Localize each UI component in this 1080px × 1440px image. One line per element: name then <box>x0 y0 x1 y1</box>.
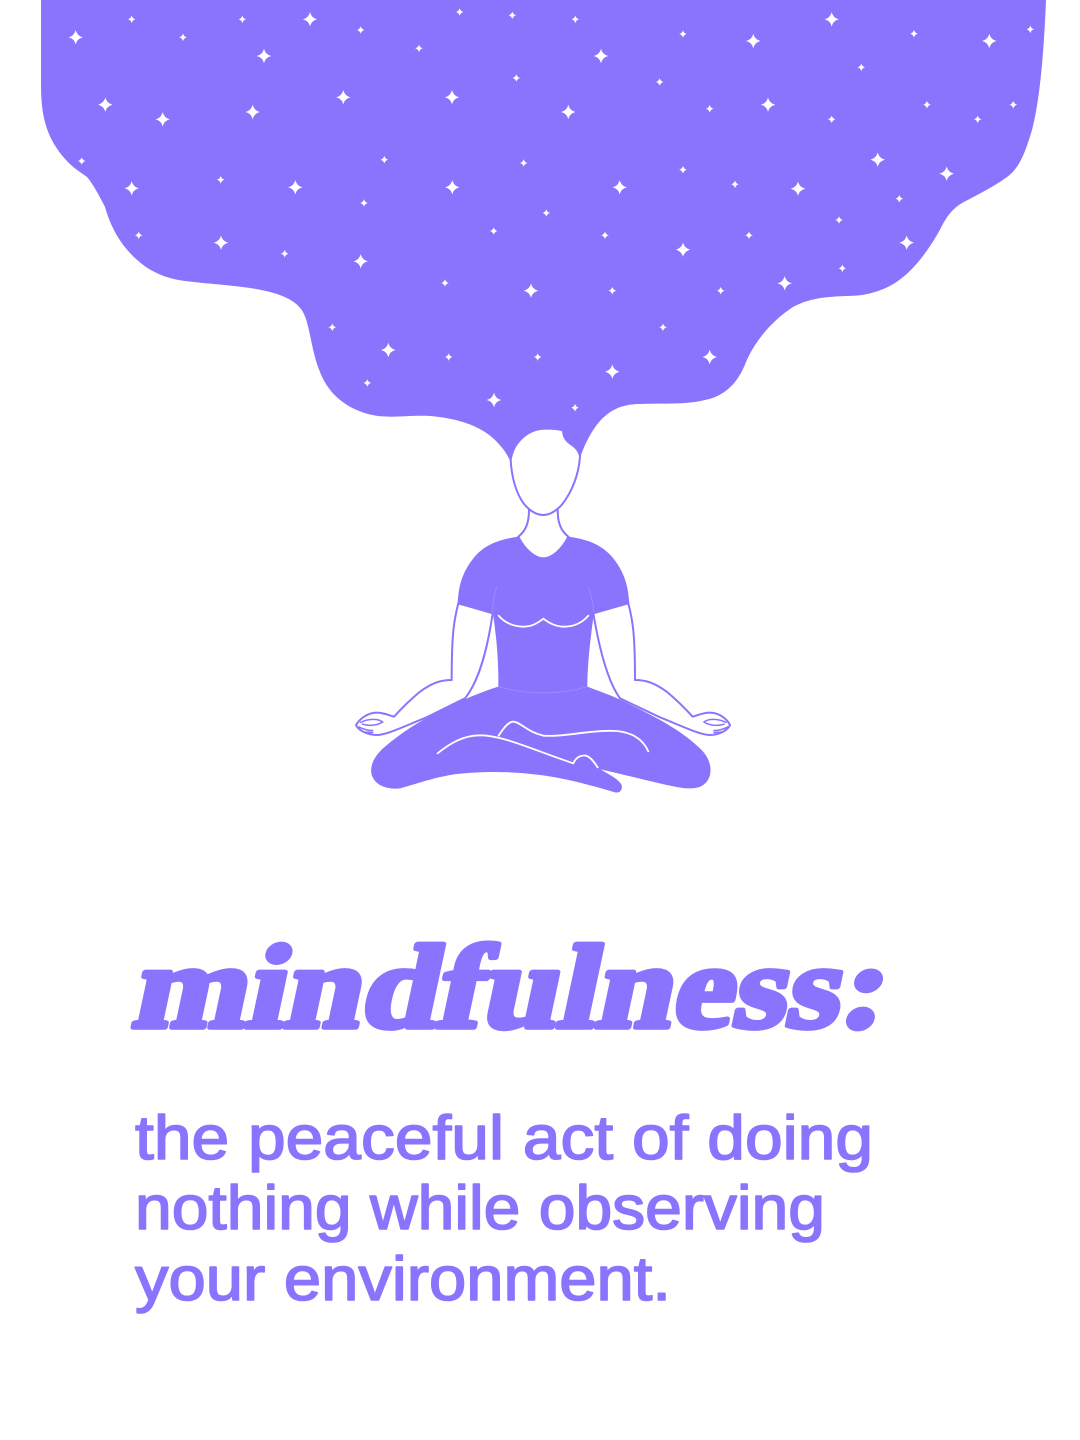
hair shape <box>41 0 1046 463</box>
small stars <box>78 8 1034 412</box>
back leg line <box>499 722 648 751</box>
front leg line <box>438 735 598 767</box>
large stars <box>68 12 996 407</box>
head <box>511 429 580 515</box>
left arm and hand <box>356 603 493 735</box>
neck <box>518 509 568 558</box>
hand details <box>358 719 728 733</box>
line 2: nothing while observing <box>135 1174 825 1243</box>
right arm and hand <box>593 603 730 735</box>
shirt, torso and crossed legs <box>371 537 711 793</box>
definition text <box>135 1104 873 1314</box>
title: mindfulness: <box>124 922 904 1054</box>
shirt seams <box>493 587 594 693</box>
meditating figure <box>356 429 730 793</box>
line 1: the peaceful act of doing <box>135 1104 873 1173</box>
hair cloud with stars <box>41 0 1046 463</box>
line 3: your environment. <box>135 1245 671 1314</box>
bust line <box>499 616 588 627</box>
